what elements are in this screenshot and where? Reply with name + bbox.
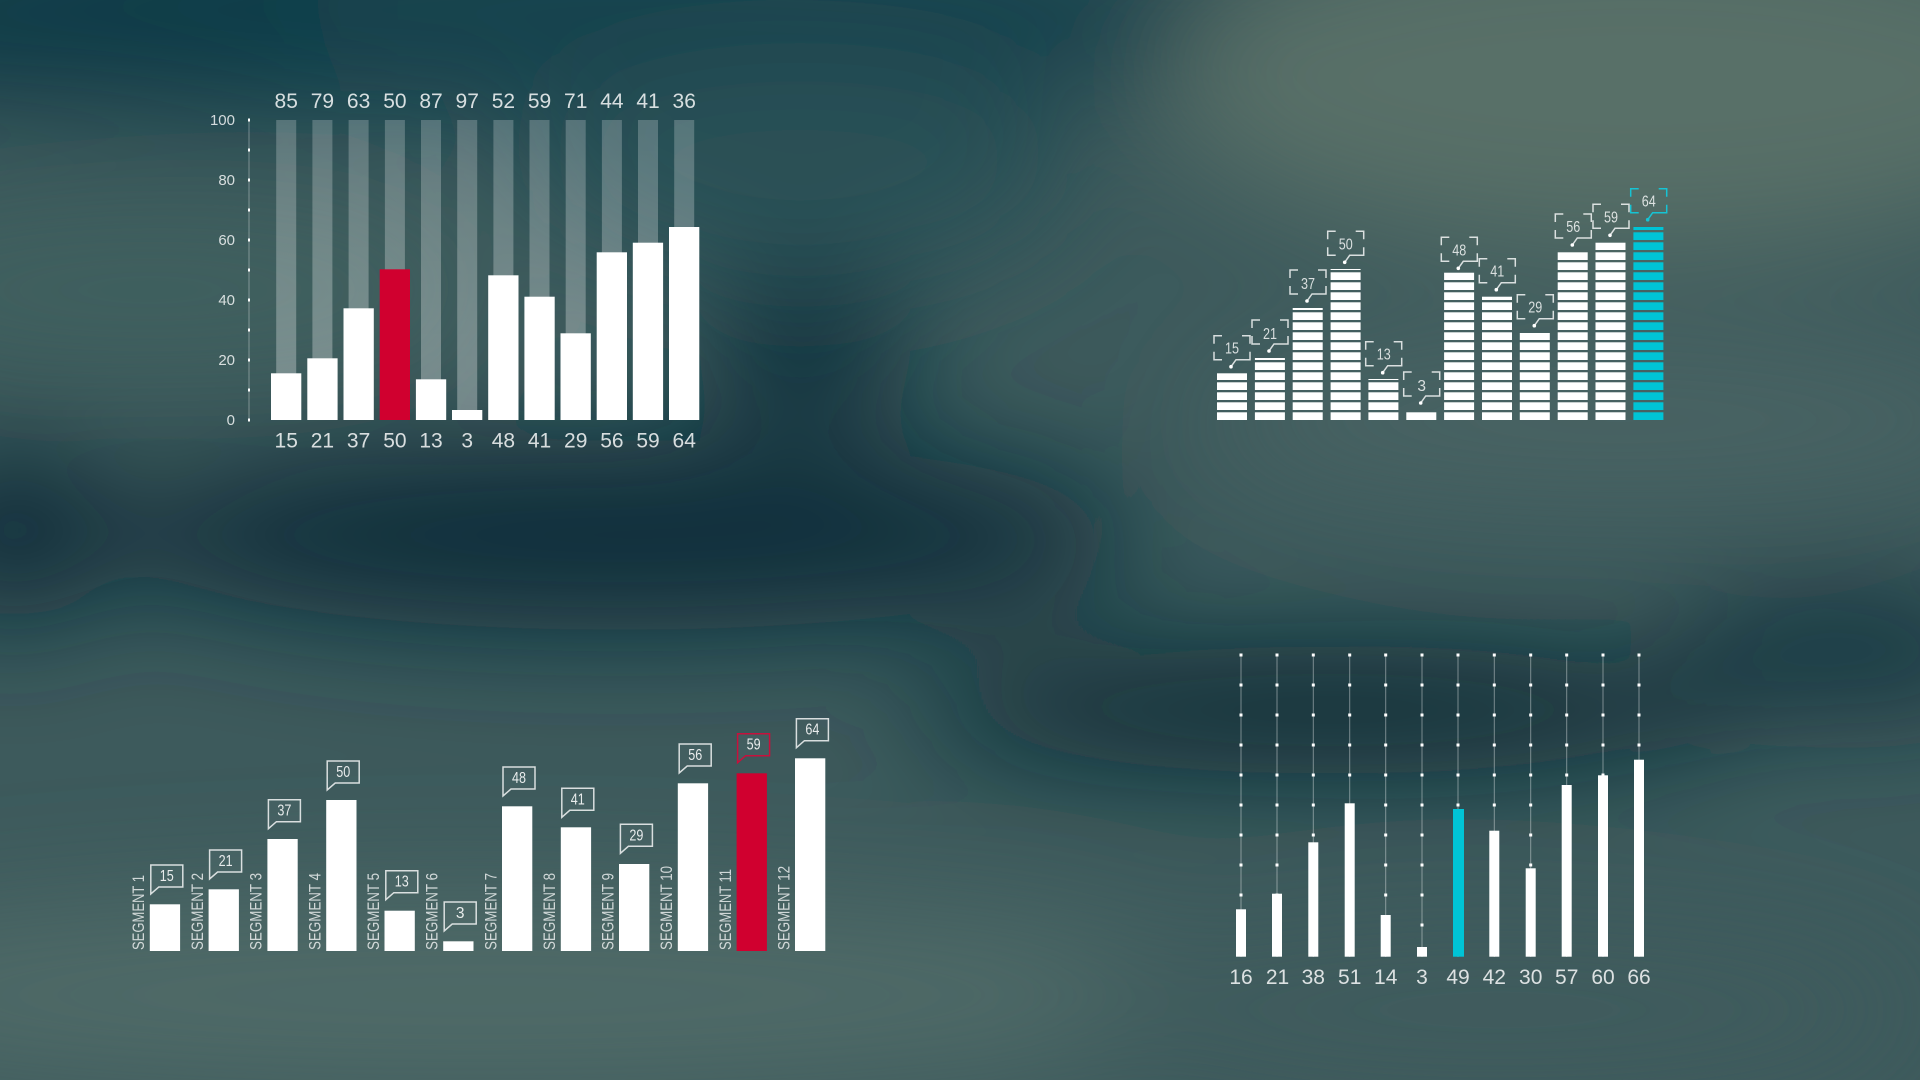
- callout: 48: 48: [512, 770, 526, 787]
- value labels: 37: [347, 430, 370, 452]
- y axis labels: 100: [210, 112, 235, 129]
- callout: 3: 3: [456, 905, 465, 922]
- callout: 56: 56: [688, 747, 702, 764]
- guide lines with dots: [1241, 654, 1639, 957]
- callout: 64: [796, 719, 828, 748]
- callout: 56: [1555, 214, 1591, 247]
- y axis labels: 40: [218, 292, 235, 309]
- remaining value labels: 85: [275, 90, 298, 113]
- panel: segmented bar chart with bracket callouts (top right): [1214, 189, 1667, 420]
- remaining value labels: 59: [528, 90, 551, 113]
- callout: 37: [1290, 270, 1326, 303]
- callout: 13: [386, 871, 418, 900]
- speech-bubble callouts: [151, 719, 828, 931]
- y axis labels: 60: [218, 232, 235, 249]
- remaining value labels: 87: [419, 90, 443, 113]
- value labels: 66: [1627, 966, 1651, 989]
- panel: segment bar chart with speech-bubble callouts (bottom left): [129, 719, 828, 951]
- callout: 59: 59: [1604, 209, 1618, 226]
- value labels: 41: [528, 430, 551, 452]
- callout: 64 highlighted: [1631, 189, 1667, 222]
- background tracks: [276, 120, 694, 420]
- vertical segment labels: SEGMENT 11: [716, 869, 735, 950]
- vertical segment labels: SEGMENT 7: [481, 873, 500, 950]
- callout: 37: 37: [277, 803, 291, 820]
- callout: 3: [444, 902, 476, 931]
- value labels: 15: [275, 430, 298, 452]
- remaining value labels: 79: [311, 90, 334, 113]
- callout: 21: [210, 850, 242, 879]
- remaining value labels: [275, 90, 696, 113]
- callout: 59 highlighted: [738, 734, 770, 763]
- value labels: 50: [383, 430, 407, 452]
- value labels: 3: [1416, 966, 1428, 989]
- callout: 41: [562, 788, 594, 817]
- vertical segment labels: SEGMENT 3: [247, 873, 266, 950]
- callout: 41: [1479, 259, 1515, 292]
- remaining value labels: 63: [347, 90, 370, 113]
- callout: 50: [1328, 231, 1364, 264]
- vertical segment labels: SEGMENT 5: [364, 873, 383, 950]
- bars: [150, 758, 825, 951]
- vertical segment labels: SEGMENT 6: [423, 873, 442, 950]
- y axis labels: 20: [218, 352, 235, 369]
- value labels: 59: [636, 430, 660, 452]
- segmented bars: [1217, 227, 1663, 420]
- callout: 29: [1517, 295, 1553, 328]
- callout: 50: 50: [336, 764, 351, 781]
- value labels: 57: [1555, 966, 1578, 989]
- callout: 3: 3: [1417, 378, 1426, 395]
- value labels: 49: [1446, 966, 1470, 989]
- remaining value labels: 50: [383, 90, 407, 113]
- value labels: [275, 430, 696, 452]
- callout: 29: 29: [1528, 300, 1542, 317]
- callout: 21: 21: [1263, 326, 1277, 343]
- remaining value labels: 52: [492, 90, 515, 113]
- value labels: 64: [673, 430, 696, 452]
- vertical segment labels: SEGMENT 8: [540, 873, 559, 950]
- callout: 21: [1252, 320, 1288, 353]
- y axis labels: [210, 112, 235, 429]
- bracket callouts: [1214, 189, 1667, 405]
- callout: 3: [1404, 372, 1440, 405]
- callout: 56: [679, 744, 711, 773]
- value labels: 13: [419, 430, 443, 452]
- callout: 50: 50: [1339, 236, 1353, 253]
- value labels: 51: [1338, 966, 1361, 989]
- value labels: 16: [1229, 966, 1253, 989]
- y axis labels: 80: [218, 172, 235, 189]
- callout: 13: [1366, 342, 1402, 374]
- callout: 64 highlighted: 64: [1642, 194, 1656, 211]
- panel: chart with tracks and axis (top left): [210, 90, 699, 452]
- value labels: 3: [461, 430, 473, 452]
- callout: 59: [1593, 204, 1629, 237]
- remaining value labels: 44: [600, 90, 624, 113]
- callout: 37: 37: [1301, 276, 1315, 293]
- callout: 64: 64: [805, 722, 820, 739]
- panel: thin bar chart with dotted guide lines (bottom right): [1229, 654, 1651, 989]
- vertical segment labels: SEGMENT 9: [598, 873, 617, 950]
- value labels: 21: [1266, 966, 1289, 989]
- value labels: 30: [1519, 966, 1542, 989]
- callout: 29: [620, 824, 652, 853]
- value labels: 21: [311, 430, 334, 452]
- vertical segment labels: SEGMENT 12: [774, 866, 793, 950]
- callout: 56: 56: [1566, 219, 1580, 236]
- remaining value labels: 36: [673, 90, 696, 113]
- callout: 41: 41: [1490, 264, 1504, 281]
- value labels: 48: [492, 430, 515, 452]
- value bars: [271, 227, 699, 420]
- value labels: 38: [1302, 966, 1325, 989]
- bars: [1236, 760, 1644, 957]
- callout: 15: [151, 865, 183, 894]
- callout: 59 highlighted: 59: [747, 737, 761, 754]
- callout: 15: 15: [1225, 341, 1239, 358]
- callout: 29: 29: [629, 827, 643, 844]
- vertical segment labels: SEGMENT 10: [657, 866, 676, 950]
- callout: 48: [503, 767, 535, 796]
- callout: 15: 15: [160, 868, 174, 885]
- value labels: 42: [1483, 966, 1506, 989]
- value labels: 56: [600, 430, 624, 452]
- remaining value labels: 71: [564, 90, 587, 113]
- vertical segment labels: [129, 866, 793, 950]
- callout: 15: [1214, 336, 1250, 368]
- vertical segment labels: SEGMENT 1: [129, 875, 148, 950]
- value labels: [1229, 966, 1651, 989]
- callout: 13: 13: [395, 874, 409, 891]
- y axis with ticks: [248, 118, 250, 422]
- callout: 21: 21: [219, 853, 233, 870]
- vertical segment labels: SEGMENT 2: [188, 873, 207, 950]
- callout: 41: 41: [571, 791, 585, 808]
- remaining value labels: 97: [456, 90, 479, 113]
- y axis labels: 0: [227, 412, 235, 429]
- callout: 48: 48: [1452, 242, 1466, 259]
- value labels: 60: [1591, 966, 1615, 989]
- remaining value labels: 41: [636, 90, 660, 113]
- value labels: 29: [564, 430, 587, 452]
- vertical segment labels: SEGMENT 4: [305, 873, 324, 950]
- callout: 48: [1441, 237, 1477, 270]
- value labels: 14: [1374, 966, 1398, 989]
- callout: 13: 13: [1377, 347, 1391, 364]
- callout: 50: [327, 761, 359, 790]
- callout: 37: [268, 800, 300, 829]
